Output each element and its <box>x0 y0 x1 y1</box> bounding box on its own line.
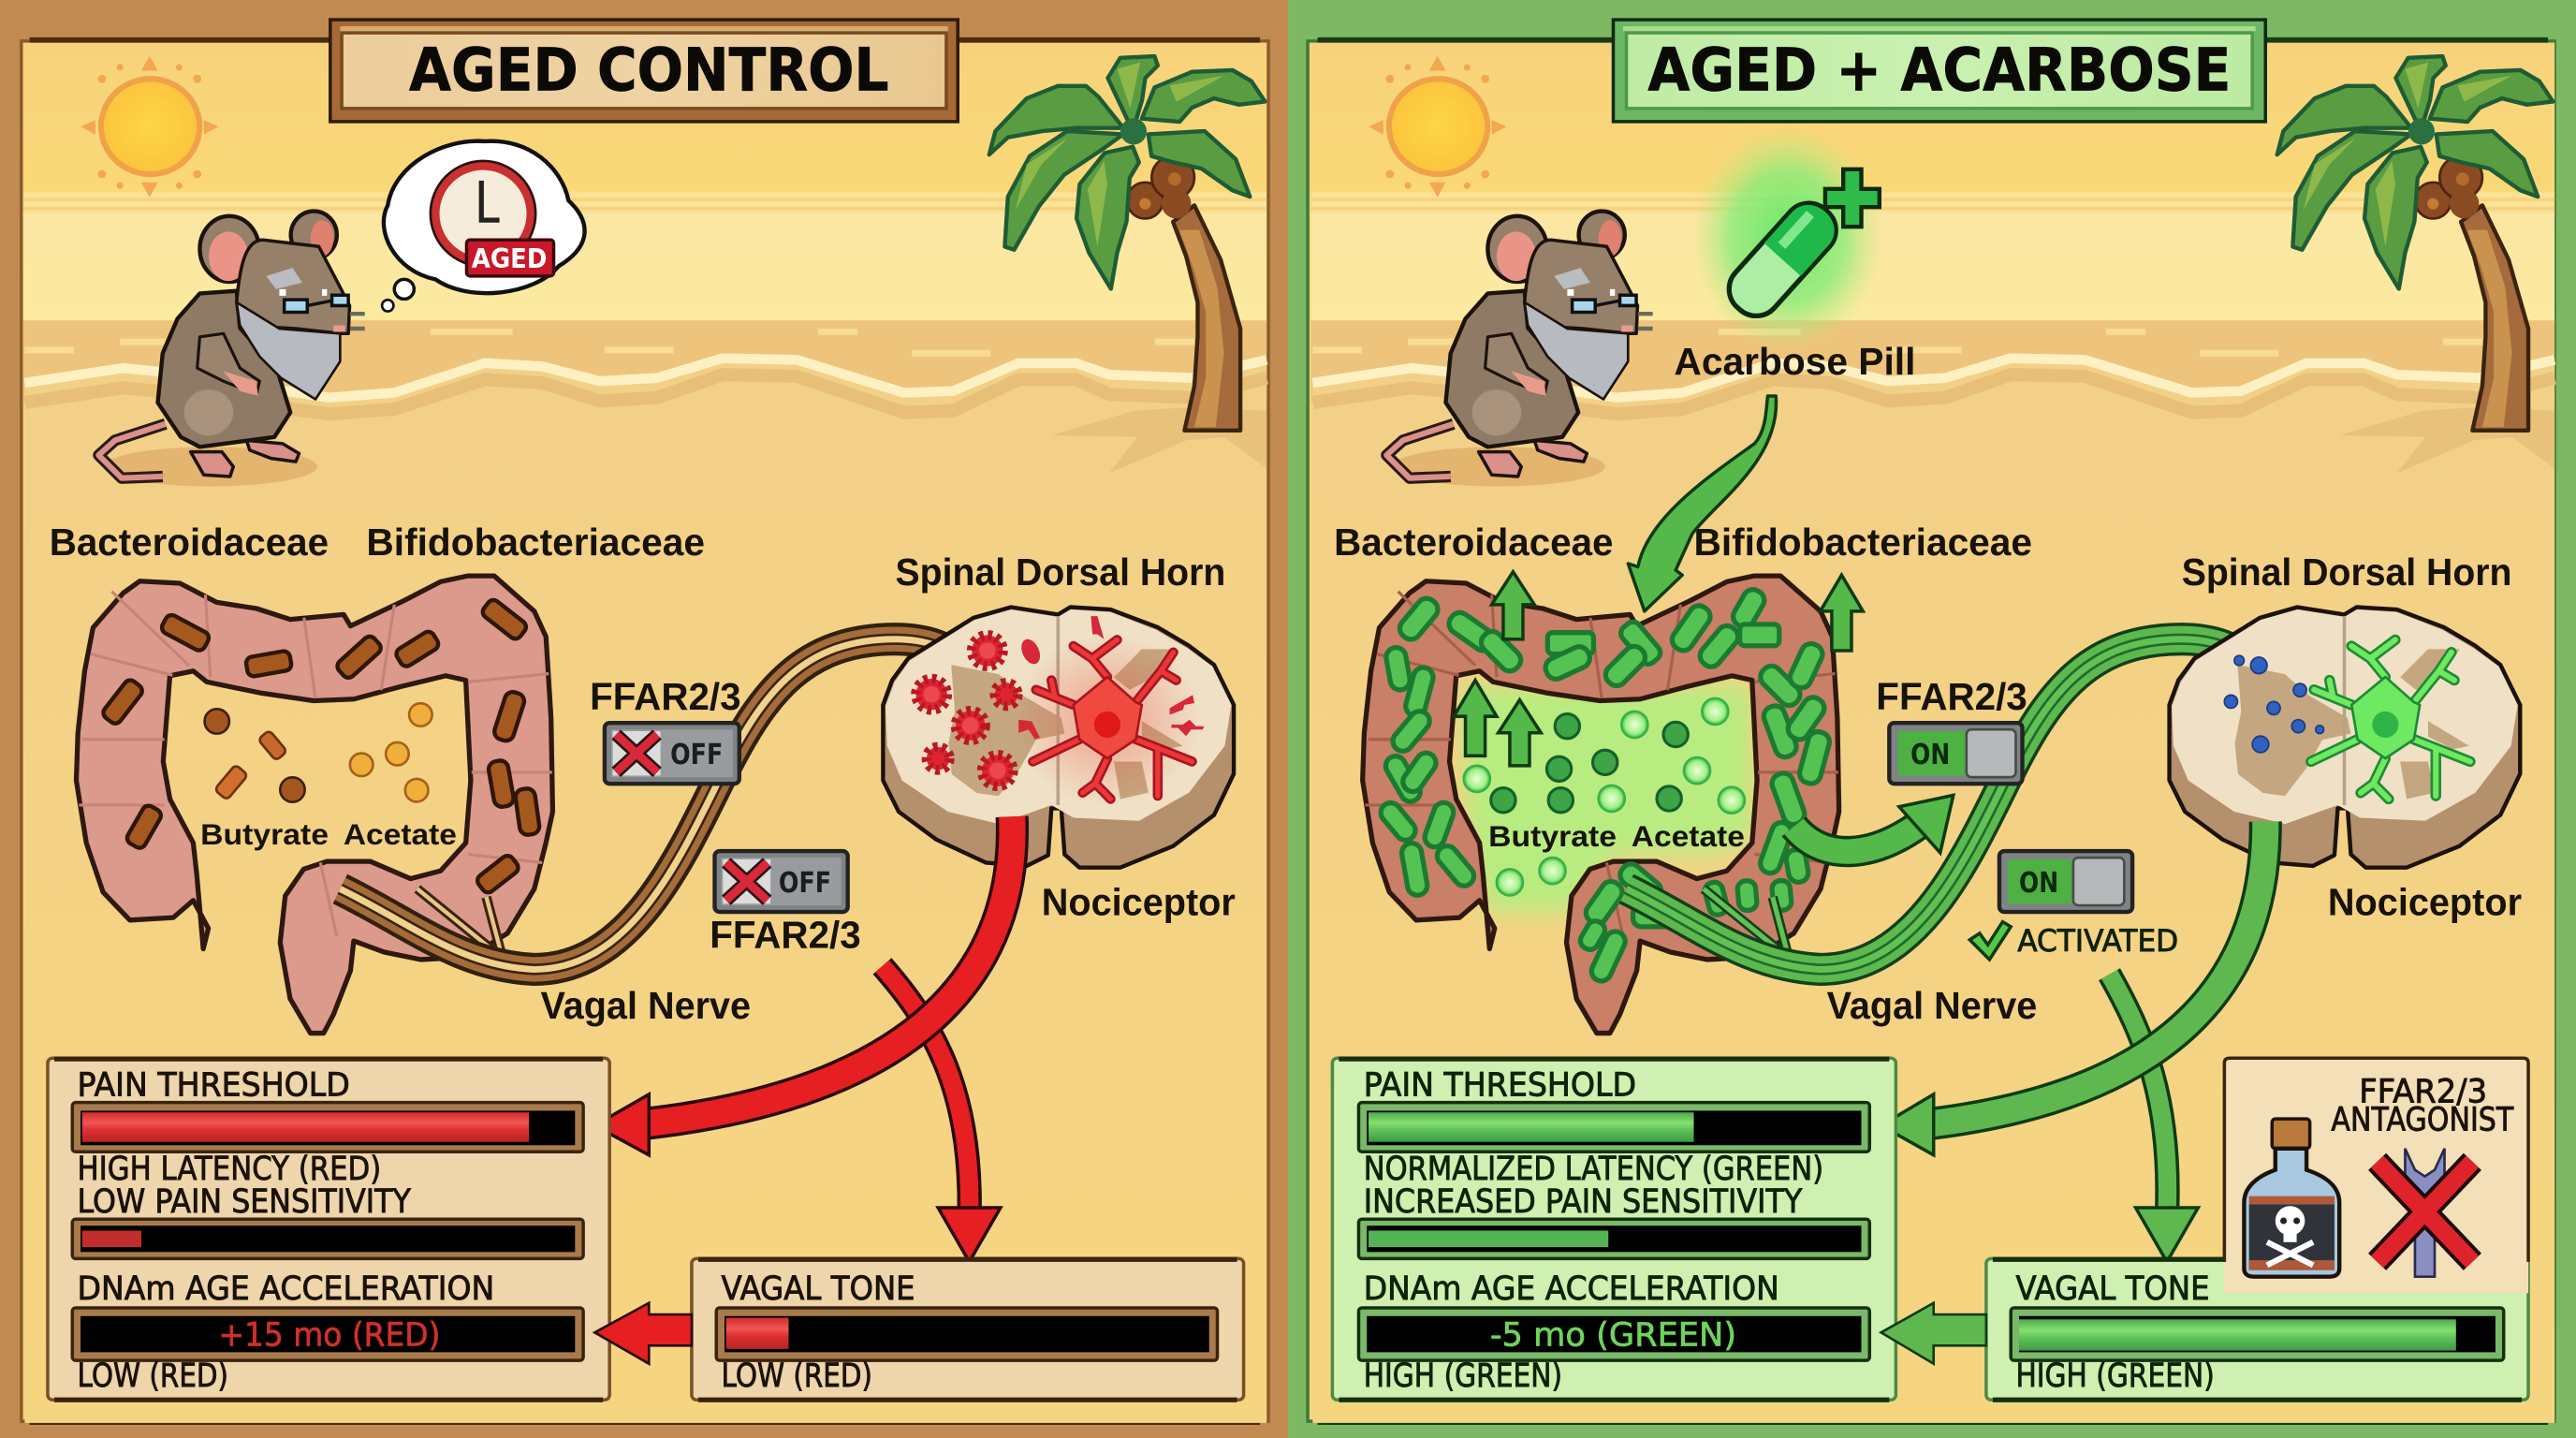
text: VAGAL TONE: VAGAL TONE <box>722 1269 915 1308</box>
label: Bacteroidaceae: Bacteroidaceae <box>50 521 329 564</box>
switch: FFAR2/3 on, lower: ON <box>2019 867 2058 900</box>
arrow: colon to FFAR2/3 <box>1794 795 1954 853</box>
short chain fatty acids: sparse butyrate and acetate <box>205 703 432 802</box>
text: ANTAGONIST: ANTAGONIST <box>2331 1100 2514 1138</box>
label: Bacteroidaceae: Bacteroidaceae <box>1334 521 1613 564</box>
text: FFAR2/3: FFAR2/3 <box>2359 1073 2487 1111</box>
title banner: aged plus acarbose: AGED + ACARBOSE <box>1647 36 2231 105</box>
label: Spinal Dorsal Horn: Spinal Dorsal Horn <box>2182 550 2511 594</box>
arrow: spinal cord to pain threshold <box>594 816 1012 1155</box>
text: high green: HIGH (GREEN) <box>1364 1357 1562 1395</box>
switch: FFAR2/3 off, lower: OFF <box>779 867 831 900</box>
panel: aged control <box>0 0 1288 1438</box>
text: low pain sensitivity: LOW PAIN SENSITIVITY <box>78 1182 411 1221</box>
label: Acetate: Acetate <box>1632 819 1745 853</box>
text: low red: LOW (RED) <box>722 1357 872 1395</box>
arrow: spinal cord to pain threshold <box>1881 822 2265 1155</box>
label: Vagal Nerve: Vagal Nerve <box>1827 984 2037 1027</box>
icon: palm tree <box>989 56 1265 431</box>
bar: pain sensitivity <box>72 1219 583 1258</box>
panel: FFAR2/3 antagonist <box>2224 1058 2528 1293</box>
icon: thought bubble with aged clock: AGED <box>472 243 547 274</box>
icon: blocked receptor <box>2378 1149 2472 1277</box>
title banner: aged control <box>330 20 958 122</box>
text: high green: HIGH (GREEN) <box>2015 1357 2215 1395</box>
label: Butyrate: Butyrate <box>200 817 329 851</box>
vagal nerve, activated <box>1627 639 2256 969</box>
icon: aged mouse <box>1386 212 1653 486</box>
switch: FFAR2/3 on, upper: ON <box>1910 739 1950 771</box>
bar: vagal tone <box>716 1308 1218 1360</box>
arrow: acarbose to colon <box>1628 396 1777 611</box>
label: FFAR2/3 upper: FFAR2/3 <box>590 675 741 718</box>
short chain fatty acid glow <box>1462 687 1751 912</box>
label: Bifidobacteriaceae: Bifidobacteriaceae <box>366 521 705 564</box>
bar: pain threshold <box>72 1103 583 1152</box>
icon: palm tree <box>2277 56 2553 431</box>
bar: DNAm age acceleration <box>72 1308 583 1360</box>
switch: FFAR2/3 on, lower <box>1999 851 2132 912</box>
icon: activated check mark <box>1969 922 2011 960</box>
colon with abundant green bacteria <box>1363 576 1839 1034</box>
arrow: spinal cord to vagal tone <box>883 966 1001 1262</box>
label: FFAR2/3 lower: FFAR2/3 <box>710 914 861 957</box>
bar: pain threshold <box>1358 1103 1869 1152</box>
arrow: vagal tone to DNAm <box>1881 1303 1986 1364</box>
panel: vagal tone <box>692 1258 1244 1400</box>
bar: DNAm age acceleration <box>1358 1308 1869 1360</box>
panel: pain threshold and DNAm age <box>48 1058 609 1400</box>
switch: FFAR2/3 on, upper <box>1889 723 2022 784</box>
spinal dorsal horn, inflamed <box>883 607 1234 868</box>
bar: DNAm age acceleration: -5 mo (GREEN) <box>1490 1315 1736 1354</box>
label: Vagal Nerve: Vagal Nerve <box>540 984 751 1027</box>
text: DNAm age acceleration: DNAm AGE ACCELERATION <box>78 1269 494 1308</box>
label: Spinal Dorsal Horn: Spinal Dorsal Horn <box>896 550 1225 594</box>
icon: glowing acarbose pill <box>1692 126 1882 350</box>
label: Acetate: Acetate <box>344 817 457 851</box>
label: Nociceptor: Nociceptor <box>1042 881 1236 924</box>
label: Bifidobacteriaceae: Bifidobacteriaceae <box>1693 521 2032 564</box>
panel: aged plus acarbose <box>1288 0 2576 1438</box>
title banner: aged control: AGED CONTROL <box>409 36 889 105</box>
colon with sparse bacteria <box>76 576 552 1034</box>
text: PAIN THRESHOLD: PAIN THRESHOLD <box>78 1066 350 1105</box>
switch: FFAR2/3 off, lower <box>714 851 848 912</box>
icon: sun <box>1368 56 1506 198</box>
label: Nociceptor: Nociceptor <box>2328 881 2522 924</box>
switch: FFAR2/3 off, upper: OFF <box>670 739 723 771</box>
arrow: vagal tone to DNAm <box>594 1303 692 1364</box>
arrow: spinal cord to vagal tone <box>2110 975 2198 1262</box>
label: Butyrate: Butyrate <box>1488 819 1617 853</box>
text: PAIN THRESHOLD: PAIN THRESHOLD <box>1364 1066 1636 1105</box>
spinal dorsal horn, calm <box>2170 607 2520 868</box>
bar: vagal tone <box>2011 1308 2504 1360</box>
icon: aged mouse <box>98 212 365 486</box>
text: high latency: HIGH LATENCY (RED) <box>78 1150 381 1188</box>
panel: vagal tone <box>1986 1258 2528 1400</box>
text: increased pain sensitivity: INCREASED PAIN SENSITIVITY <box>1364 1182 1803 1221</box>
switch: FFAR2/3 off, upper <box>605 723 739 784</box>
bar: DNAm age acceleration: +15 mo (RED) <box>218 1315 440 1354</box>
label: Acarbose Pill: Acarbose Pill <box>1674 340 1915 383</box>
arrows: increased bacteria and metabolites <box>1454 572 1863 766</box>
label: FFAR2/3: FFAR2/3 <box>1876 675 2027 718</box>
bar: pain sensitivity <box>1358 1219 1869 1258</box>
vagal nerve, inactive <box>340 639 970 969</box>
text: DNAm age acceleration: DNAm AGE ACCELERATION <box>1364 1269 1779 1308</box>
icon: poison bottle <box>2244 1119 2339 1277</box>
text: normalized latency: NORMALIZED LATENCY (GREEN) <box>1364 1150 1823 1188</box>
text: ACTIVATED: ACTIVATED <box>2017 925 2178 959</box>
panel: pain threshold and DNAm age <box>1332 1058 1895 1400</box>
title banner: aged plus acarbose <box>1613 20 2265 122</box>
icon: thought bubble with aged clock <box>382 141 585 312</box>
text: low red: LOW (RED) <box>78 1357 228 1395</box>
text: VAGAL TONE: VAGAL TONE <box>2015 1269 2210 1308</box>
short chain fatty acids: abundant <box>1464 698 1745 895</box>
icon: sun <box>80 56 218 198</box>
